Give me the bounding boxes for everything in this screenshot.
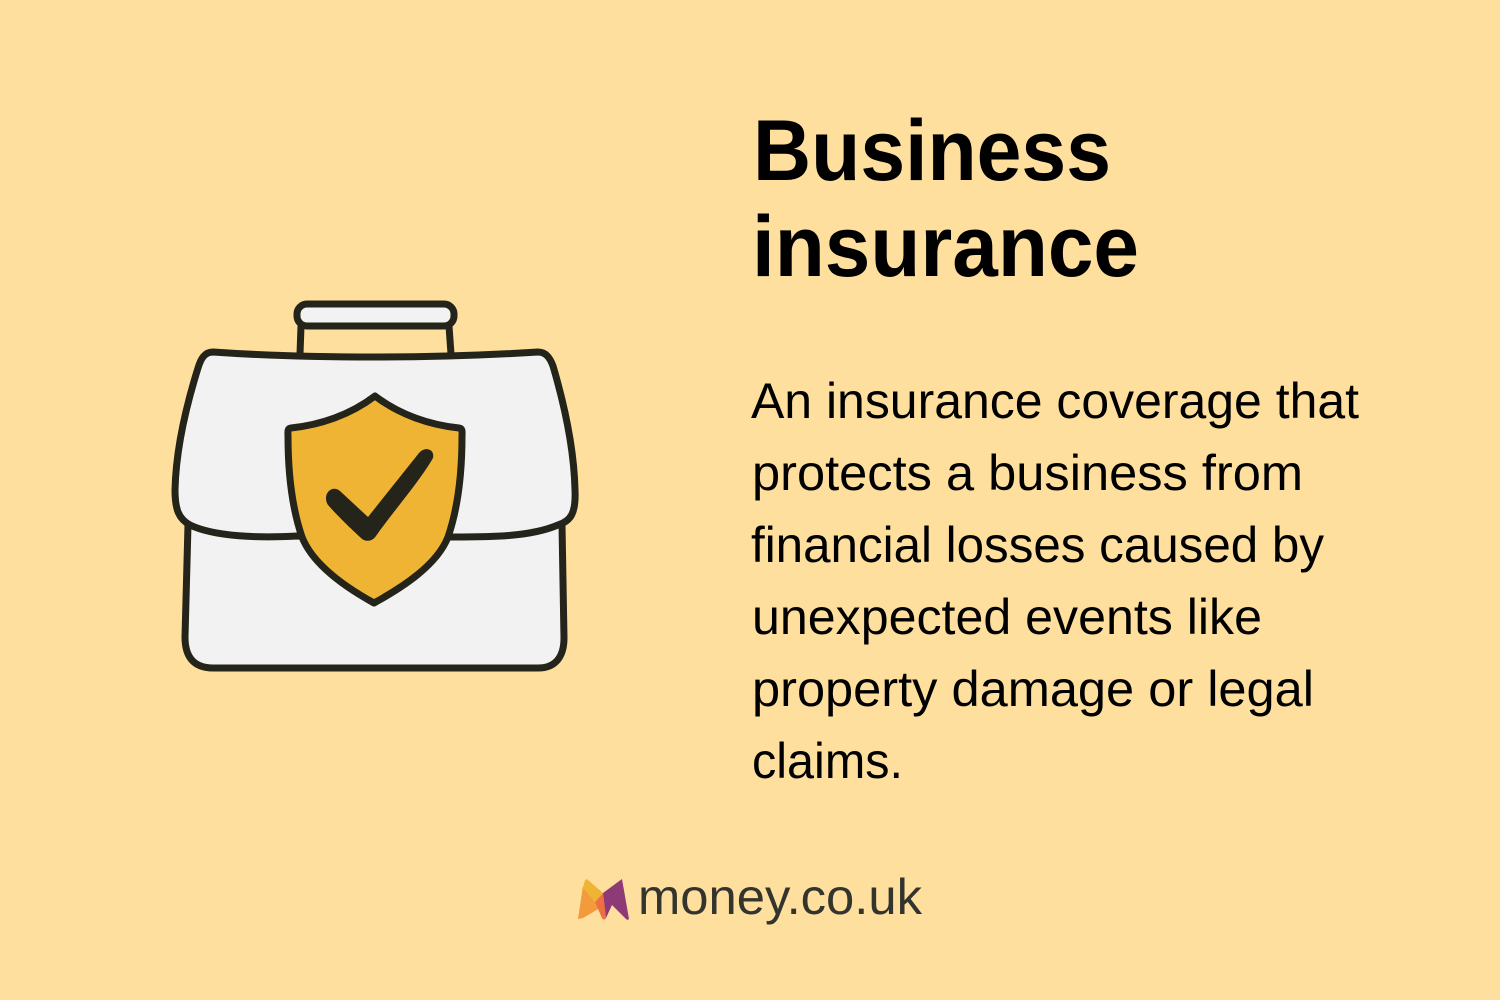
icon: briefcase with shield	[175, 304, 575, 668]
description text: protects a business from	[752, 445, 1303, 501]
description text: claims.	[752, 733, 903, 789]
description text: unexpected events like	[752, 589, 1262, 645]
description text: An insurance coverage that	[751, 373, 1359, 429]
briefcase flap	[175, 352, 575, 537]
description text: financial losses caused by	[751, 517, 1324, 573]
briefcase handle	[297, 304, 454, 354]
icon: logo mark	[578, 879, 629, 920]
check mark	[326, 449, 433, 541]
title	[752, 103, 1139, 295]
description text	[751, 373, 1359, 789]
logo wordmark: money.co.uk	[638, 869, 923, 925]
description text: property damage or legal	[752, 661, 1314, 717]
title: Business	[753, 103, 1111, 199]
logo: money.co.uk	[578, 869, 923, 925]
briefcase body	[185, 525, 564, 668]
shield	[288, 396, 462, 603]
title: insurance	[752, 199, 1139, 295]
